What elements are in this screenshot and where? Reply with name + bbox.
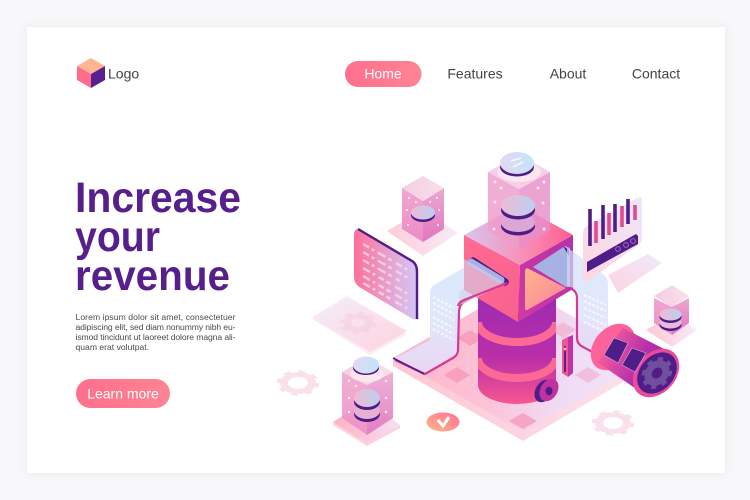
drum: [582, 315, 689, 406]
body text: quam erat volutpat.: [76, 342, 149, 352]
cube right panel: [525, 246, 574, 310]
top disk: [353, 356, 379, 375]
title: Increase: [75, 174, 241, 222]
code panel: [354, 229, 418, 319]
button: learn more: [76, 379, 170, 408]
title: revenue: [75, 252, 230, 300]
dark bars: [590, 199, 628, 246]
tower: right: [646, 285, 697, 347]
body text: Lorem ipsum dolor sit amet, consectetuer: [76, 312, 236, 322]
central tower: [488, 152, 550, 250]
right data sheet: [571, 250, 608, 357]
body text: adipiscing elit, sed diam nonummy nibh eu-: [76, 322, 236, 332]
top disk: [500, 152, 534, 176]
title: [75, 174, 241, 300]
icon: drum gear: [637, 353, 677, 393]
icon: check badge: [426, 412, 460, 432]
logo text: Logo: [108, 66, 139, 82]
nav button: Home: Home: [364, 66, 402, 82]
tower: bottom left: [333, 356, 400, 446]
gear card: [312, 296, 407, 355]
body text: [76, 312, 236, 352]
cube left opening: [458, 259, 507, 306]
nav link: Features: Features: [447, 66, 503, 82]
platform tiles: [444, 322, 601, 429]
wheel: [531, 375, 562, 406]
cube: [458, 205, 574, 322]
stored disks: [501, 195, 535, 236]
main cylinder: [478, 290, 556, 405]
icon: logo cube: [77, 58, 105, 88]
icon: gear right: [594, 411, 632, 435]
body text: ismod tincidunt ut laoreet dolore magna ali-: [76, 332, 236, 342]
chart panel: [583, 197, 642, 281]
small pillar: [562, 335, 573, 377]
pink bars: [596, 205, 635, 243]
platform: [393, 285, 645, 441]
drum windows: [604, 338, 628, 363]
title: your: [75, 213, 160, 261]
nav link: Contact: Contact: [632, 66, 680, 82]
chart label strip: [587, 234, 638, 272]
tower: top left: [387, 176, 458, 256]
nav button: Home: [345, 61, 422, 87]
navigation: [345, 61, 680, 87]
logo: [77, 58, 139, 88]
chart strip: [608, 254, 662, 293]
left data sheet: [393, 268, 490, 374]
icon: gear left: [278, 371, 318, 395]
button: learn more: Learn more: [87, 386, 159, 402]
nav link: About: About: [550, 66, 586, 82]
